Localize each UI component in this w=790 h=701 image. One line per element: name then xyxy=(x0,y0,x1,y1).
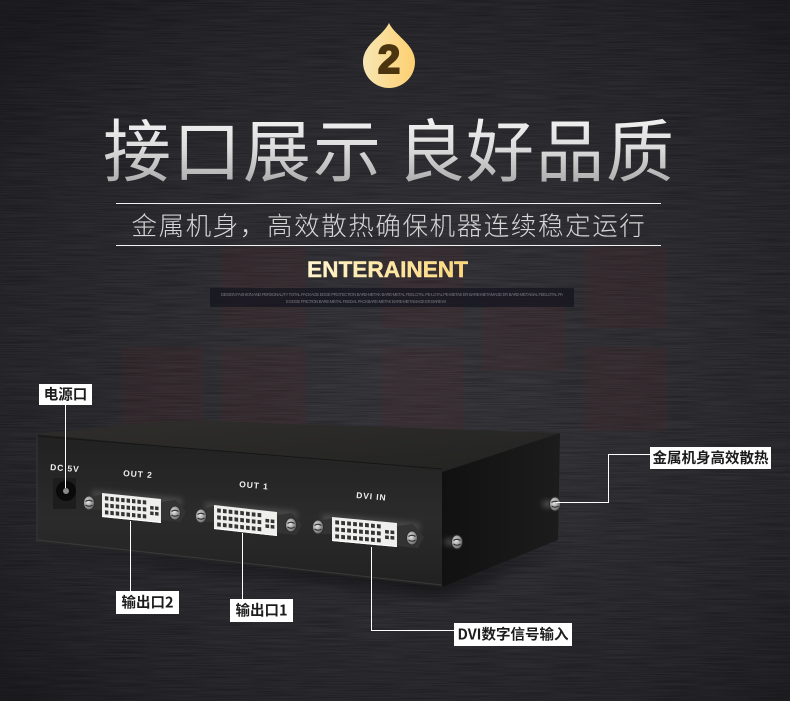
small caption bar: E EDGE FRICTION BARE-METAL FEEDAL PACKBARE-METAK BARE-METAMAGE ER BARE-M xyxy=(286,299,446,304)
connector glow xyxy=(92,490,420,531)
callout: metal body xyxy=(556,447,771,502)
port labels: DC 5V xyxy=(50,462,80,474)
callout: output 2: 输出口2 xyxy=(121,592,174,612)
small caption bar: DESIGN FASHION AND PERSONALITY TOTAL PACKAGE EDGE PROTECTION BARE-METAK BARE-METAL FEELGTAL PE-LGTAL PE-METAE ER BARE-METAMAGE ER BARE-METAMAL FEELGTAL PA xyxy=(221,292,563,297)
side screws xyxy=(445,497,560,549)
heading: ENTERAINENT: ENTERAINENT xyxy=(307,257,468,282)
subtitle with rules: 金属机身，高效散热确保机器连续稳定运行 xyxy=(132,206,646,243)
top face xyxy=(36,420,560,472)
callout: power port: 电源口 xyxy=(44,384,87,404)
callout: DVI input: DVI数字信号输入 xyxy=(458,624,569,644)
title: 接口展示良好品质 xyxy=(103,97,674,196)
port labels: OUT 2 xyxy=(123,468,153,480)
port labels: DVI IN xyxy=(356,490,387,503)
callout: metal body: 金属机身高效散热 xyxy=(652,447,769,468)
icon: gold number drop: 2 xyxy=(378,38,400,82)
callout: output 1: 输出口1 xyxy=(235,600,288,620)
faint red background blocks xyxy=(121,247,668,431)
port labels xyxy=(50,462,387,503)
callout: output 2 xyxy=(116,521,179,614)
callout: DVI input xyxy=(372,547,572,646)
small caption bar xyxy=(210,288,574,307)
power jack xyxy=(53,478,76,509)
callout: power port xyxy=(39,384,92,488)
right side face xyxy=(442,433,560,587)
port labels: OUT 1 xyxy=(239,479,269,492)
icon: gold number drop xyxy=(363,23,415,88)
connector: OUT 2 xyxy=(84,493,186,523)
device shadow xyxy=(50,545,565,596)
connector: DVI IN xyxy=(312,517,424,548)
front face xyxy=(36,434,442,587)
callout: output 1 xyxy=(230,533,293,622)
connector: OUT 1 xyxy=(196,505,302,536)
device: DVI splitter box xyxy=(36,420,565,596)
